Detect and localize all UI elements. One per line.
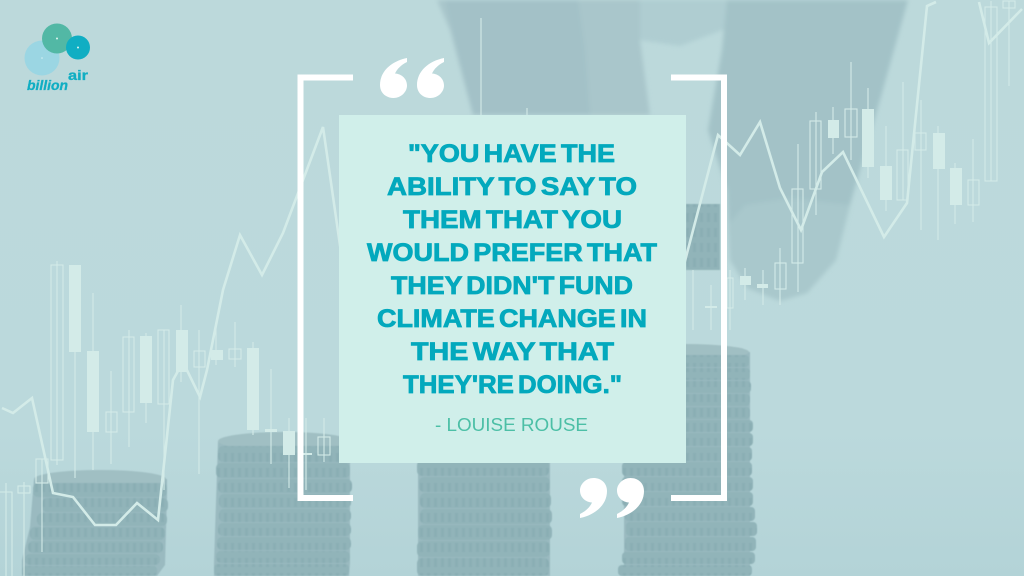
quote text: THEY'RE DOING." <box>403 371 622 399</box>
quote text: THE WAY THAT <box>411 338 614 366</box>
logo: billion air: billion <box>27 77 68 93</box>
candlestick chart: right <box>693 1 1015 330</box>
coin stack 1 <box>22 470 168 576</box>
frame bracket: left <box>300 78 353 498</box>
quote text: ABILITY TO SAY TO <box>387 173 637 201</box>
photo: upper fingers <box>437 0 908 301</box>
quote text: THEY DIDN'T FUND <box>391 272 633 300</box>
quote text: WOULD PREFER THAT <box>367 239 657 267</box>
coin stack 2 <box>214 432 352 576</box>
quote panel <box>339 115 686 463</box>
icon: closing quotation mark <box>580 478 644 518</box>
coin held between fingers <box>686 204 720 270</box>
quote text: THEM THAT YOU <box>403 206 622 234</box>
coin stack 4 <box>618 344 757 576</box>
icon: opening quotation mark <box>380 58 444 98</box>
frame bracket: right <box>671 78 724 498</box>
coin stack 3 <box>417 460 552 576</box>
quote text: "YOU HAVE THE <box>408 140 615 168</box>
logo: billion air <box>24 24 90 93</box>
attribution: - LOUISE ROUSE <box>435 415 588 435</box>
candlestick chart: left <box>0 18 527 576</box>
quote text <box>367 140 657 399</box>
logo: billion air: air <box>68 67 89 83</box>
quote text: CLIMATE CHANGE IN <box>377 305 647 333</box>
